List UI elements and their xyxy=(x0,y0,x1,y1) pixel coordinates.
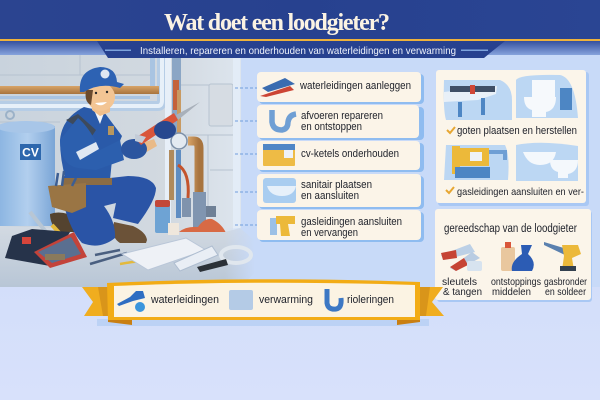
floor plans xyxy=(122,238,206,270)
task card: waterleidingen aanleggen xyxy=(257,72,424,104)
boiler tank xyxy=(0,111,55,226)
title: Wat doet een loodgieter? xyxy=(164,10,390,36)
pressure gauge xyxy=(171,133,187,149)
photo panel: plumber at work xyxy=(0,52,255,287)
right tail fold xyxy=(420,287,430,316)
floor xyxy=(0,226,254,287)
copper pipe horizontal xyxy=(0,86,159,94)
task card: gasleidingen: gasleidingen aansluiten xyxy=(301,216,402,228)
icon: sewer pipe xyxy=(327,289,341,309)
check and caption: goten: goten plaatsen en herstellen xyxy=(457,125,577,137)
collar xyxy=(94,110,104,124)
task card: gasleidingen xyxy=(257,210,424,242)
illustration: sink and toilet xyxy=(516,143,578,181)
neck and face xyxy=(92,100,110,116)
caulk gun xyxy=(135,113,178,145)
icon: boiler xyxy=(263,144,295,166)
caption: gasbronder xyxy=(544,276,587,298)
task card: cv-ketels: cv-ketels onderhouden xyxy=(301,148,399,160)
wall blocks xyxy=(0,55,233,210)
red sealant foam xyxy=(179,219,226,233)
nozzle xyxy=(176,102,200,120)
panel heading: gereedschap van de loodgieter xyxy=(444,223,577,235)
gloved lower hand xyxy=(121,139,147,159)
ribbon body xyxy=(107,279,420,320)
yellow screwdriver xyxy=(120,260,155,264)
caption: sleutels xyxy=(442,276,482,298)
cap xyxy=(80,67,124,92)
tape measure xyxy=(197,259,228,272)
pipe coil xyxy=(221,247,251,263)
task list xyxy=(257,72,424,242)
sleeve reflective band xyxy=(76,142,99,160)
left tail xyxy=(82,287,108,316)
right tail xyxy=(420,287,444,316)
rolled drawing xyxy=(174,246,218,271)
rear boot xyxy=(50,212,78,232)
right side backdrop xyxy=(240,55,600,287)
tool pouch xyxy=(48,183,86,213)
loose tools on floor xyxy=(90,250,127,264)
icon: tap with drop xyxy=(117,291,145,312)
wrench xyxy=(135,134,146,143)
icon: gas torch drill xyxy=(544,242,581,271)
right wall edge xyxy=(233,55,240,233)
panel: extra tasks xyxy=(436,70,589,206)
plumber xyxy=(48,67,200,246)
task card: gasleidingen: en vervangen xyxy=(301,227,358,239)
floor fade at right edge xyxy=(225,228,255,287)
subtitle: Installeren, repareren en onderhouden van waterleidingen en verwarming xyxy=(140,45,456,57)
illustration: gas boiler xyxy=(444,145,509,180)
belt xyxy=(62,178,112,185)
torso xyxy=(60,107,122,180)
pouch tools xyxy=(56,171,76,186)
subtitle right dash xyxy=(461,50,488,51)
header bar xyxy=(0,0,600,39)
ribbon shadow xyxy=(97,319,429,326)
task card: sanitair: sanitair plaatsen xyxy=(301,179,372,191)
icon: wrenches and pliers xyxy=(441,244,482,271)
sealant can xyxy=(155,200,179,235)
tank label CV: CV xyxy=(22,146,39,160)
label: verwarming: verwarming xyxy=(259,294,313,306)
icon: drill xyxy=(270,216,295,236)
panel: gereedschap xyxy=(435,209,592,302)
connector dashes xyxy=(235,88,257,225)
task card: afvoeren: en ontstoppen xyxy=(301,121,362,133)
icon: drain pipe xyxy=(272,110,296,130)
gloved upper hand xyxy=(154,121,176,139)
caption: ontstoppings: ontstoppings xyxy=(491,276,541,288)
illustration: toilet xyxy=(516,75,578,118)
icon: sink xyxy=(263,178,296,203)
front boot xyxy=(113,222,147,243)
white pipes xyxy=(0,55,171,231)
trousers xyxy=(64,176,156,246)
ribbon folds xyxy=(108,319,420,325)
caption: ontstoppings xyxy=(491,276,541,298)
label: rioleringen: rioleringen xyxy=(347,294,394,306)
caption: gasbronder: gasbronder xyxy=(544,276,587,288)
task card: waterleidingen aanleggen: waterleidingen aanleggen xyxy=(299,80,411,92)
ribbon inner xyxy=(114,283,415,317)
bottom ribbon xyxy=(82,279,444,326)
icon: radiator xyxy=(229,290,253,310)
subtitle left dash xyxy=(105,50,131,51)
task card: afvoeren: afvoeren repareren xyxy=(301,110,383,122)
caption: sleutels: sleutels xyxy=(442,276,477,288)
icon: pipes xyxy=(260,78,295,97)
forearm xyxy=(142,139,157,154)
icon: drain cleaner and bag xyxy=(501,242,534,271)
task card: cv-ketels xyxy=(257,141,424,172)
strap xyxy=(66,114,96,136)
task card: afvoeren xyxy=(257,105,424,140)
sleeve arm xyxy=(60,118,124,170)
check and caption: gasleidingen: gasleidingen aansluiten en ver- xyxy=(457,186,584,198)
chest pocket xyxy=(108,126,114,135)
caption: sleutels: & tangen xyxy=(443,286,482,298)
wall xyxy=(0,52,241,232)
band under header xyxy=(0,41,600,55)
caption: ontstoppings: middelen xyxy=(492,286,531,298)
label: waterleidingen: waterleidingen xyxy=(150,294,219,306)
task card: sanitair: en aansluiten xyxy=(301,190,359,202)
illustration: gutter xyxy=(444,80,512,120)
left tail fold xyxy=(98,287,108,316)
vertical pipes xyxy=(169,55,216,228)
subtitle ribbon xyxy=(97,41,505,58)
gold line xyxy=(0,39,600,41)
caption: gasbronder: en soldeer xyxy=(545,286,586,298)
toolbox xyxy=(5,212,87,268)
task card: sanitair xyxy=(257,174,424,209)
